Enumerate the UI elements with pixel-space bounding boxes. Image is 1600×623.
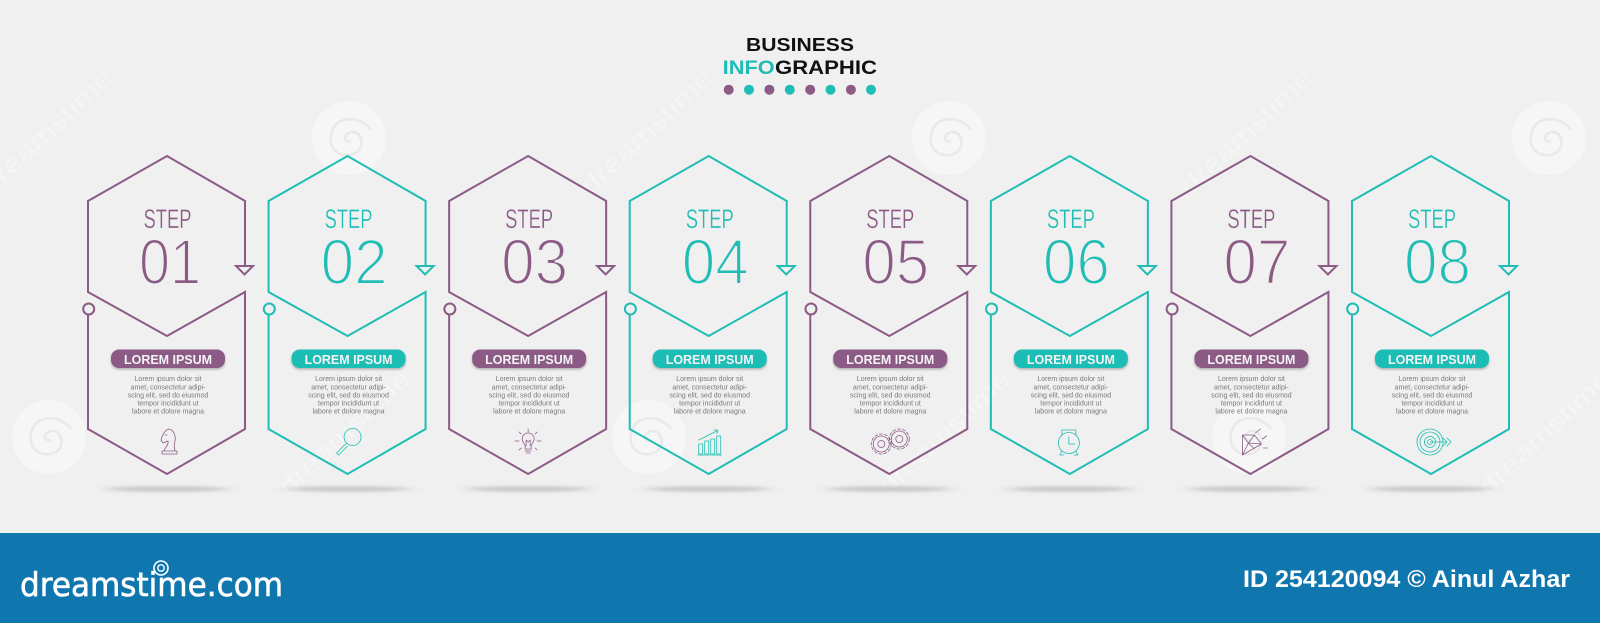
title dots	[724, 85, 876, 95]
panel: step 04: scing elit, sed do eiusmod	[669, 392, 750, 400]
panel: step 02: scing elit, sed do eiusmod	[308, 392, 389, 400]
panel: step 06: STEP	[1047, 204, 1095, 234]
panel: step 02: tempor incididunt ut	[318, 400, 379, 408]
panel: step 01: amet, consectetur adipi-	[131, 384, 206, 392]
panel: step 01	[83, 156, 253, 492]
panel: step 06: LOREM IPSUM	[1027, 352, 1115, 367]
panel: step 08: labore et dolore magna	[1396, 408, 1468, 416]
panel: step 01: LOREM IPSUM	[124, 352, 212, 367]
panel: step 06: Lorem ipsum dolor sit	[1037, 376, 1104, 383]
watermark: spirals and diagonal text: dreamstime	[575, 64, 718, 200]
panel: step 02: 02	[321, 226, 388, 298]
panel: step 04: 04	[682, 226, 749, 298]
panel: step 01: tempor incididunt ut	[137, 400, 199, 408]
panel: step 04: LOREM IPSUM	[666, 352, 754, 367]
panel: step 05: LOREM IPSUM	[846, 352, 934, 367]
icon: bar chart	[698, 430, 722, 455]
panel: step 02: labore et dolore magna	[313, 408, 385, 416]
panel: step 07: amet, consectetur adipi-	[1214, 384, 1289, 392]
icon: light bulb	[515, 429, 541, 453]
panel: step 03: amet, consectetur adipi-	[492, 384, 567, 392]
icon: target with arrow	[1417, 429, 1451, 455]
panel: step 03: LOREM IPSUM	[485, 352, 573, 367]
panel: step 02	[264, 156, 434, 492]
panel: step 04: Lorem ipsum dolor sit	[676, 376, 743, 383]
panel: step 02: Lorem ipsum dolor sit	[315, 376, 382, 383]
icon: gears	[871, 429, 909, 454]
panel: step 04: STEP	[686, 204, 734, 234]
panel: step 06: labore et dolore magna	[1035, 408, 1107, 416]
panel: step 07: LOREM IPSUM	[1207, 352, 1295, 367]
panel: step 08: amet, consectetur adipi-	[1395, 384, 1470, 392]
panel: step 02: LOREM IPSUM	[305, 352, 393, 367]
panel: step 01: scing elit, sed do eiusmod	[128, 392, 208, 400]
panel: step 03: labore et dolore magna	[493, 408, 565, 416]
panel: step 07: scing elit, sed do eiusmod	[1211, 392, 1292, 400]
panel: step 05: 05	[862, 226, 929, 298]
panel: step 08: STEP	[1408, 204, 1456, 234]
panel: step 04: amet, consectetur adipi-	[672, 384, 748, 392]
panel: step 08: Lorem ipsum dolor sit	[1399, 376, 1466, 383]
icon: diamond	[1242, 429, 1267, 455]
panel: step 01: Lorem ipsum dolor sit	[135, 376, 202, 383]
panel: step 07: 07	[1223, 226, 1290, 298]
panel: step 07	[1167, 156, 1336, 492]
panel: step 06: scing elit, sed do eiusmod	[1031, 392, 1111, 400]
panel: step 06: amet, consectetur adipi-	[1033, 384, 1109, 392]
panel: step 03: Lorem ipsum dolor sit	[496, 376, 563, 383]
panel: step 08: 08	[1404, 226, 1471, 298]
panel: step 03: scing elit, sed do eiusmod	[489, 392, 570, 400]
footer credit: ID 254120094 © Ainul Azhar	[1243, 566, 1570, 593]
title: INFO	[723, 58, 775, 79]
panel: step 05: Lorem ipsum dolor sit	[857, 376, 924, 383]
panel: step 07: tempor incididunt ut	[1221, 400, 1282, 408]
watermark: spirals and diagonal text: dreamstime	[1175, 64, 1318, 200]
icon: magnifier	[337, 428, 361, 455]
panel: step 07: STEP	[1227, 204, 1275, 234]
panel: step 03: tempor incididunt ut	[499, 400, 560, 408]
footer bar	[0, 533, 1600, 623]
panel: step 08: tempor incididunt ut	[1401, 400, 1463, 408]
panel: step 06: tempor incididunt ut	[1040, 400, 1101, 408]
panel: step 03: 03	[501, 226, 568, 298]
title: GRAPHIC	[775, 58, 877, 79]
panel: step 01: STEP	[144, 204, 192, 234]
title: BUSINESS	[746, 35, 854, 55]
panel: step 01: 01	[139, 226, 201, 298]
watermark: spirals and diagonal text	[0, 64, 1600, 501]
title	[723, 35, 877, 79]
icon: alarm clock	[1058, 430, 1079, 455]
panel: step 02: amet, consectetur adipi-	[311, 384, 387, 392]
panel: step 05: labore et dolore magna	[854, 408, 926, 416]
panel: step 04: tempor incididunt ut	[679, 400, 740, 408]
watermark: spirals and diagonal text: dreamstime	[273, 365, 416, 501]
watermark: spirals and diagonal text: dreamstime	[873, 365, 1016, 501]
panel: step 06: 06	[1043, 226, 1110, 298]
panel: step 08: scing elit, sed do eiusmod	[1392, 392, 1472, 400]
panel: step 07: labore et dolore magna	[1215, 408, 1288, 416]
icon: chess knight	[161, 429, 177, 454]
panel: step 03	[444, 156, 614, 492]
panel: step 05: STEP	[866, 204, 914, 234]
panel: step 08	[1347, 156, 1517, 492]
footer logo: dreamstime.com	[20, 565, 283, 604]
panel: step 05: scing elit, sed do eiusmod	[850, 392, 931, 400]
panel: step 05: tempor incididunt ut	[860, 400, 921, 408]
panel: step 07: Lorem ipsum dolor sit	[1218, 376, 1285, 383]
panel: step 08: LOREM IPSUM	[1388, 352, 1476, 367]
panel: step 02: STEP	[325, 204, 373, 234]
panel: step 06	[986, 156, 1156, 492]
panel: step 05: amet, consectetur adipi-	[853, 384, 928, 392]
panel: step 01: labore et dolore magna	[132, 408, 204, 416]
panel: step 04: labore et dolore magna	[674, 408, 746, 416]
panel: step 04	[625, 156, 795, 492]
panel: step 03: STEP	[505, 204, 553, 234]
watermark: spirals and diagonal text: dreamstime	[1473, 365, 1600, 501]
panel: step 05	[805, 156, 975, 492]
